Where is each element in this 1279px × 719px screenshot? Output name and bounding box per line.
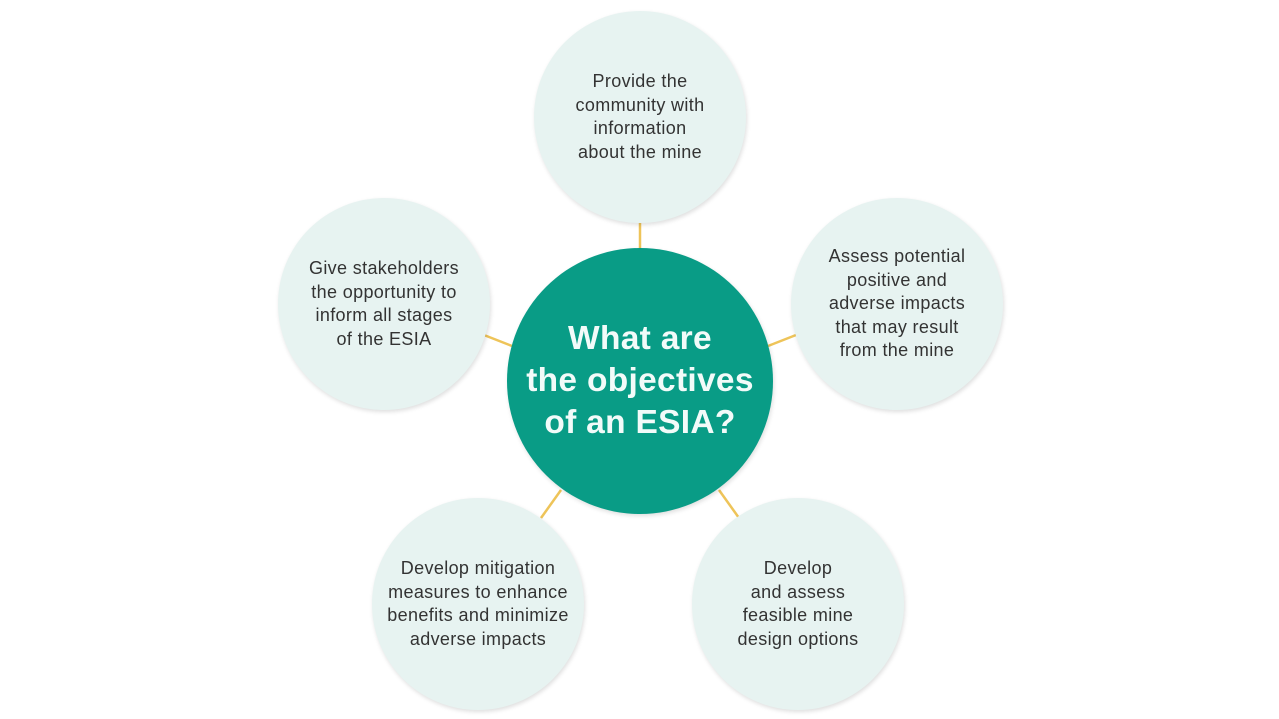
circle: develop mitigation measures: Develop mitigation <box>401 558 555 578</box>
circle: develop design options: and assess <box>751 582 845 602</box>
circle: provide community information: information <box>594 118 686 138</box>
circle: give stakeholders opportunity: Give stakeholders <box>309 258 459 278</box>
circle: develop design options <box>692 498 904 710</box>
circle: give stakeholders opportunity: inform all stages <box>315 305 452 325</box>
center title circle <box>507 248 773 514</box>
circle: develop mitigation measures <box>372 498 584 710</box>
circle: develop mitigation measures: adverse impacts <box>410 628 546 648</box>
circle: give stakeholders opportunity: the opportunity to <box>311 282 457 302</box>
circle: develop mitigation measures: measures to enhance <box>388 582 568 602</box>
circle: assess impacts: from the mine <box>840 340 954 360</box>
circle: give stakeholders opportunity: of the ESIA <box>337 328 431 348</box>
center title circle: of an ESIA? <box>544 404 736 441</box>
circle: assess impacts: positive and <box>847 270 947 290</box>
circle: assess impacts: Assess potential <box>829 246 965 266</box>
circle: assess impacts: adverse impacts <box>829 293 965 313</box>
circle: provide community information: Provide the <box>593 71 687 91</box>
circle: provide community information: about the mine <box>578 142 702 162</box>
circle: develop design options: feasible mine <box>743 605 853 625</box>
circle: develop mitigation measures: benefits and minimize <box>387 605 569 625</box>
center title circle: What are <box>568 320 712 357</box>
circle: provide community information <box>534 11 746 223</box>
circle: assess impacts <box>791 198 1003 410</box>
circle: develop design options: design options <box>738 628 858 648</box>
circle: assess impacts: that may result <box>835 317 959 337</box>
circle: provide community information: community with <box>576 94 704 114</box>
center title circle: the objectives <box>526 362 754 399</box>
circle: give stakeholders opportunity <box>278 198 490 410</box>
circle: develop design options: Develop <box>764 558 832 578</box>
